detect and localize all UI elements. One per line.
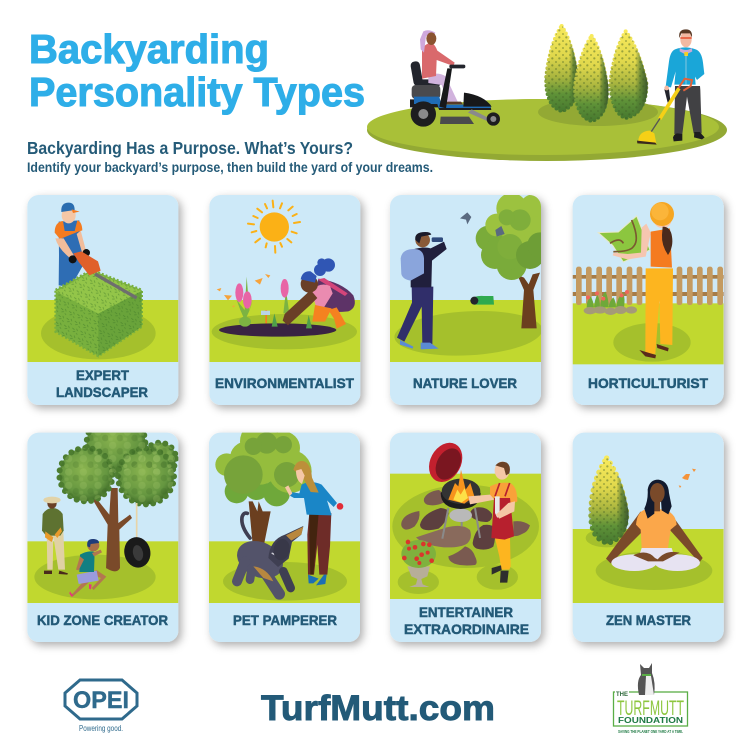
row 1: right cards	[390, 193, 724, 405]
subheading: Identify your backyard’s purpose, then build the yard of your dreams.	[27, 159, 433, 175]
icon: man with string trimmer	[637, 29, 705, 145]
icon: meditating woman	[606, 480, 703, 571]
label: expert landscaper: LANDSCAPER	[56, 384, 148, 400]
icon: tire swing	[121, 503, 153, 570]
panel: expert landscaper	[27, 195, 178, 405]
label: environmentalist: ENVIRONMENTALIST	[215, 375, 354, 391]
title	[29, 26, 365, 115]
logo: TurfMutt Foundation: TURFMUTT	[617, 697, 684, 720]
stepping stones	[401, 490, 530, 565]
icon: three shrubs	[545, 25, 648, 122]
logo: TurfMutt Foundation: SAVING THE PLANET ONE YARD AT A TIME.	[618, 729, 683, 734]
icon: woman with map	[598, 202, 674, 358]
panel: entertainer extraordinaire	[390, 433, 541, 642]
subheading: Backyarding Has a Purpose. What’s Yours?	[27, 138, 353, 158]
icon: shrub	[589, 457, 629, 544]
logo: OPEI	[65, 680, 137, 733]
label: zen master: ZEN MASTER	[606, 612, 691, 628]
small shadows	[398, 564, 518, 594]
icon: running child	[69, 539, 106, 597]
icon: woman with ball	[285, 461, 343, 585]
label: entertainer extraordinaire: EXTRAORDINAIRE	[404, 621, 529, 637]
website: TurfMutt.com	[261, 689, 495, 728]
icon: kneeling gardener	[283, 258, 355, 329]
label: kid zone creator: KID ZONE CREATOR	[37, 612, 168, 628]
label: expert landscaper: EXPERT	[76, 367, 129, 383]
row 1: left cards	[27, 195, 360, 405]
panel: kid zone creator	[27, 414, 178, 642]
icon: man in apron	[468, 462, 517, 583]
icon: tree	[215, 421, 312, 545]
icon: dog	[231, 513, 303, 594]
icon: garden bed with flowers	[217, 274, 336, 337]
shrub shadow	[538, 98, 658, 126]
icon: man in hat	[42, 497, 68, 575]
title: Backyarding	[29, 26, 269, 72]
panel: zen master	[573, 433, 724, 642]
label: nature lover: NATURE LOVER	[413, 375, 517, 391]
icon: hedge	[56, 270, 142, 356]
panel: pet pamperer	[209, 421, 360, 642]
icon: sun	[248, 201, 300, 253]
logo: OPEI: Powering good.	[79, 724, 123, 733]
icon: flower bed with rocks	[584, 290, 637, 315]
label: entertainer extraordinaire: ENTERTAINER	[419, 604, 513, 620]
subheading	[27, 138, 433, 175]
icon: grill	[422, 437, 481, 539]
label: horticulturist: HORTICULTURIST	[588, 375, 708, 391]
panel: environmentalist	[209, 195, 360, 405]
logo: TurfMutt Foundation: FOUNDATION	[618, 716, 683, 725]
icon: birds	[460, 212, 505, 237]
row 2: left cards	[27, 414, 360, 642]
icon: hedge trimmer	[73, 251, 137, 298]
hero illustration: lawn with mower, shrubs and trimmer	[367, 25, 727, 161]
icon: robot mower	[470, 296, 494, 305]
label: entertainer extraordinaire	[404, 604, 529, 637]
panel: nature lover	[390, 193, 553, 405]
panel: horticulturist	[573, 195, 724, 405]
logo: TurfMutt Foundation	[614, 663, 688, 734]
title: Personality Types	[29, 69, 365, 115]
lawn	[367, 99, 727, 161]
icon: man in overalls	[55, 203, 90, 287]
icon: person with binoculars	[397, 232, 447, 349]
icon: tree	[476, 195, 541, 328]
logo: OPEI: OPEI	[73, 687, 129, 714]
label: pet pamperer: PET PAMPERER	[233, 612, 337, 628]
fence	[573, 267, 724, 305]
icon: person riding mower	[410, 30, 500, 127]
icon: tree	[59, 414, 176, 571]
icon: butterflies	[679, 469, 696, 488]
logo: TurfMutt Foundation: THE	[616, 692, 628, 698]
icon: flower urn	[401, 540, 436, 587]
row 2: right cards	[390, 433, 724, 642]
label: expert landscaper	[56, 367, 148, 400]
